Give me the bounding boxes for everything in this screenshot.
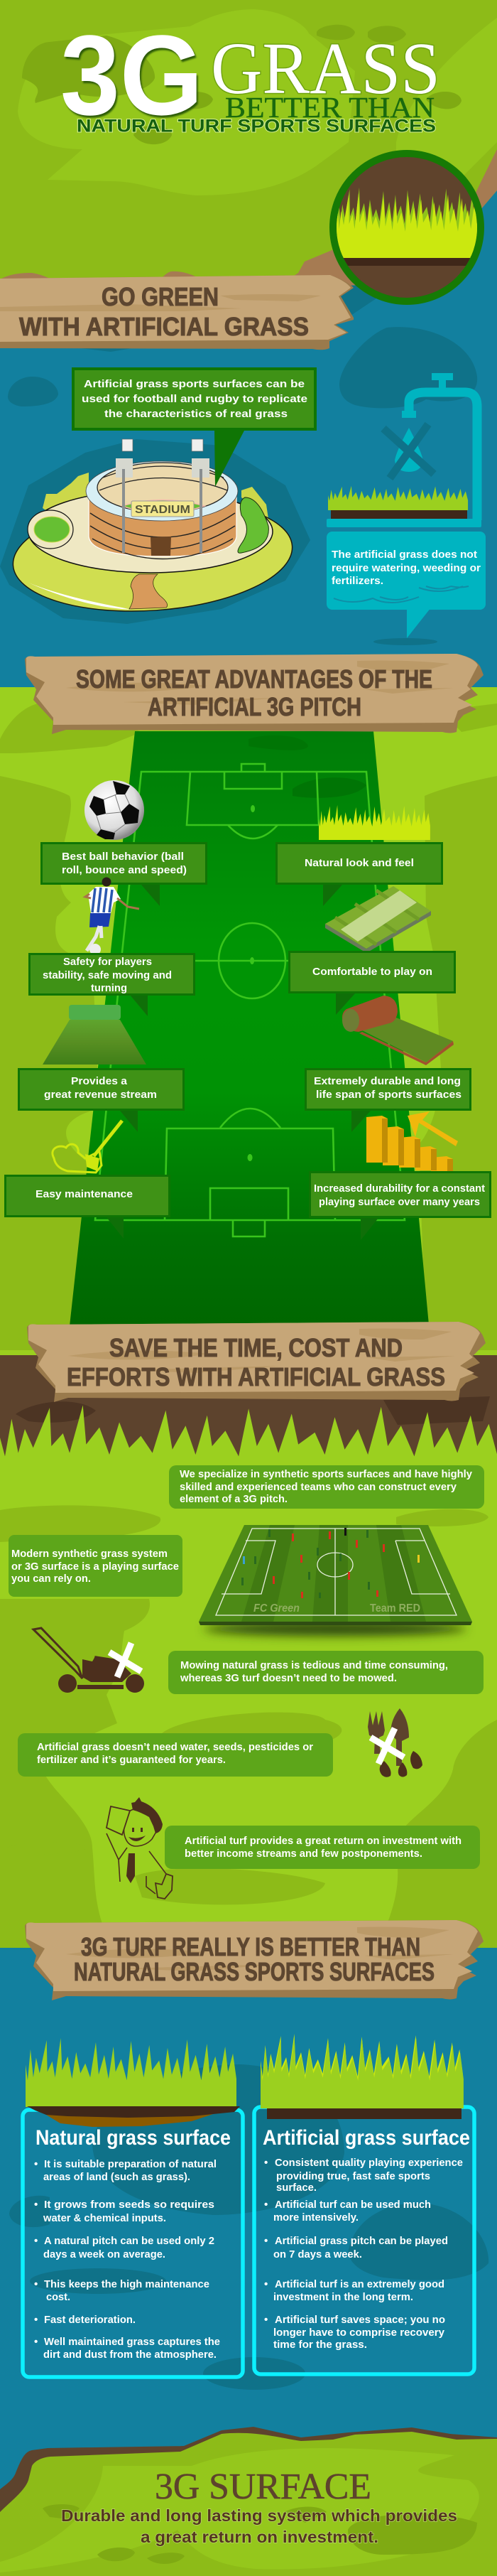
label: life span of sports surfaces: [316, 1089, 462, 1101]
man thumbs-up hand: [155, 1874, 173, 1899]
text box: no water or seeds: [18, 1733, 333, 1777]
sign plank: [26, 654, 478, 725]
field side: [199, 1622, 472, 1625]
stadium tiers: [99, 466, 227, 490]
advantage box: best ball behavior: [41, 843, 206, 906]
text box: mowing natural grass: [168, 1651, 484, 1694]
callout shadow: [373, 638, 437, 645]
panel bullet list: •: [264, 2235, 268, 2247]
label: Comfortable to play on: [312, 966, 432, 978]
icon: turf roll: [342, 996, 454, 1065]
stadium pitch: [122, 500, 204, 513]
panel bullet list: •: [264, 2199, 268, 2211]
callout text: the characteristics of real grass: [104, 408, 288, 420]
text: Modern synthetic grass system: [11, 1548, 168, 1560]
icon: lawn mower crossed out: [33, 1628, 144, 1693]
sign plank shadow: [25, 654, 484, 734]
turf carpet: [362, 1018, 453, 1062]
panel: artificial grass surface: [254, 2034, 474, 2374]
player shorts: [89, 913, 111, 927]
text: you can rely on.: [11, 1573, 91, 1585]
advantages section background: [0, 687, 497, 1359]
field lines: [216, 1529, 457, 1615]
soil band: [0, 1355, 497, 1465]
bottom shoreline: [0, 2427, 497, 2516]
panel bullet list: time for the grass.: [273, 2339, 367, 2351]
panel bullet list: •: [34, 2278, 38, 2290]
icon: natural grass patch: [319, 805, 430, 840]
advantage box: durable life span: [305, 1069, 470, 1132]
decorative water blobs: [9, 2064, 488, 2390]
artificial grass tuft: [261, 2037, 464, 2108]
advantage box: revenue stream: [18, 1069, 183, 1132]
tail: [130, 995, 148, 1016]
callout text: fertilizers.: [332, 575, 383, 587]
team label: FC Green: FC Green: [253, 1602, 300, 1615]
label: roll, bounce and speed): [62, 864, 187, 876]
pitch lines: [95, 764, 405, 1236]
panel bullet list: Artificial turf can be used much: [275, 2199, 431, 2211]
garden spade: [390, 1708, 409, 1766]
panel bullet list: It is suitable preparation of natural: [44, 2158, 217, 2170]
field surface: [199, 1525, 472, 1622]
text: [180, 1468, 473, 1505]
box: [277, 843, 442, 884]
natural grass tuft: [26, 2038, 236, 2107]
closing title: 3G SURFACE: 3G SURFACE: [155, 2467, 371, 2507]
brown shoreline: [0, 149, 497, 313]
pitch spots: [248, 805, 255, 1161]
stadium rim: [86, 461, 238, 521]
panel heading: Artificial grass surface: [263, 2126, 470, 2150]
man face: [124, 1809, 157, 1846]
heading sign: advantages: [25, 654, 484, 734]
icon: football player: [85, 877, 139, 955]
text box: return on investment: [165, 1826, 480, 1869]
panel bullet list: •: [264, 2157, 268, 2169]
icon: happy businessman with money: [106, 1797, 173, 1899]
field goalkeeper yellow: [417, 1555, 420, 1563]
bottom light patches: [0, 2448, 479, 2572]
man hair: [131, 1797, 163, 1833]
right water inlet: [426, 190, 497, 355]
text: [185, 1835, 462, 1860]
stadium small lawn: [28, 510, 73, 549]
faucet nozzle: [402, 411, 416, 418]
decorative water blobs: [0, 327, 477, 624]
stadium plaza: [28, 490, 273, 573]
panel bullet list: Fast deterioration.: [44, 2314, 136, 2326]
text: [37, 1741, 313, 1766]
artificial grass highlight: [261, 2034, 463, 2103]
sign plank shadow: [27, 1322, 486, 1402]
tail: [323, 885, 342, 906]
player legs: [87, 926, 102, 951]
callout text: [332, 549, 481, 587]
tail: [120, 1111, 138, 1132]
turf roll body: [342, 996, 398, 1032]
stadium island: [9, 491, 296, 620]
chart bars: [366, 1116, 453, 1171]
box: [290, 952, 454, 992]
panel bullet list: •: [34, 2199, 38, 2211]
panel heading: Natural grass surface: [36, 2126, 231, 2150]
stadium cylinder: [89, 491, 236, 556]
stadium pond lawn: [238, 497, 268, 553]
stadium path: [129, 574, 168, 609]
crossed out mark: [383, 424, 434, 478]
text: element of a 3G pitch.: [180, 1493, 288, 1505]
field players green: [241, 1529, 370, 1598]
label: Extremely durable and long: [314, 1075, 461, 1087]
text: We specialize in synthetic sports surfaces and have highly: [180, 1468, 473, 1480]
title: [60, 11, 440, 139]
callout box: [327, 532, 486, 610]
sign plank: [28, 1322, 480, 1393]
football pitch: [69, 731, 430, 1332]
box: [305, 1069, 470, 1110]
label: Safety for players: [63, 956, 152, 968]
panel bullet list: days a week on average.: [43, 2248, 165, 2260]
panel bullet list: [34, 2158, 220, 2361]
panel bullet list: longer have to comprise recovery: [273, 2327, 445, 2339]
label: great revenue stream: [44, 1089, 157, 1101]
player shirt stripes: [92, 888, 112, 912]
artificial soil strip: [267, 2108, 462, 2119]
sign text: artificial 3G pitch: ARTIFICIAL 3G PITCH: [148, 692, 361, 721]
pitch surface: [69, 731, 430, 1332]
closing title: [61, 2467, 457, 2546]
tail: [336, 993, 355, 1015]
label: [314, 1075, 462, 1101]
label: [314, 1182, 485, 1208]
3D football field illustration: [199, 1525, 472, 1636]
mower wheels: [58, 1674, 144, 1693]
bar shading: [382, 1119, 453, 1171]
icon: cricket pitch: [325, 886, 431, 953]
panel bullet list: Artificial turf is an extremely good: [275, 2278, 444, 2290]
garden fork: [368, 1711, 385, 1754]
text: whereas 3G turf doesn’t need to be mowed.: [180, 1672, 397, 1684]
stadium sign: [131, 501, 194, 517]
player ball: [89, 944, 101, 955]
mower handle: [33, 1628, 82, 1678]
panel bullet list: •: [34, 2235, 38, 2247]
sign wood grain: [66, 1927, 453, 1971]
tail: [361, 1218, 378, 1240]
box: [18, 1069, 183, 1110]
label: Provides a: [71, 1075, 128, 1087]
label: turning: [91, 982, 127, 994]
faucet handle: [432, 373, 453, 392]
panel bullet list: investment in the long term.: [273, 2291, 413, 2303]
player arms: [85, 894, 139, 909]
panel bullet list: on 7 days a week.: [273, 2248, 362, 2260]
title: BETTER THAN: BETTER THAN: [225, 91, 435, 124]
callout text: require watering, weeding or: [332, 562, 481, 574]
title: 3G: 3G: [60, 11, 203, 139]
box: [41, 843, 206, 884]
stadium sign text: STADIUM: [135, 504, 190, 516]
callout: artificial grass sports surfaces: [73, 369, 315, 487]
player shirt: [88, 887, 121, 913]
closing text line two: a great return on investment.: [141, 2528, 378, 2546]
grass cross-section circle: [333, 153, 483, 301]
sign text: with artificial grass: WITH ARTIFICIAL GRASS: [19, 312, 309, 341]
panel bullet list: areas of land (such as grass).: [43, 2171, 190, 2183]
hero section background: [0, 0, 497, 313]
advantage box: comfortable to play on: [290, 952, 454, 1015]
icon: broom and dust: [53, 1121, 122, 1173]
water drop: [395, 428, 423, 472]
advantage box: easy maintenance: [6, 1175, 169, 1239]
panel bullet list: Artificial turf saves space; you no: [275, 2314, 445, 2326]
team label: Team RED: Team RED: [370, 1602, 420, 1615]
sign text: go green: GO GREEN: [102, 282, 219, 311]
faucet pipe: [409, 392, 477, 520]
panel bullet list: cost.: [46, 2291, 70, 2303]
sign wood grain: [66, 661, 453, 705]
player head: [102, 877, 111, 887]
advantage box: safety for players: [30, 954, 195, 1016]
panel frame: [23, 2110, 243, 2377]
faucet base: [327, 519, 481, 527]
title: GRASS: GRASS: [211, 28, 440, 109]
text: fertilizer and it’s guaranteed for years.: [37, 1754, 226, 1766]
icon: soccer ball: [84, 780, 144, 840]
stadium illustration: [9, 439, 296, 620]
heading sign: 3G turf better: [25, 1920, 484, 2000]
man eyes and smile: [129, 1828, 146, 1841]
field shadow: [204, 1622, 466, 1636]
bottom green land: [0, 2432, 497, 2576]
sign text: save the time: SAVE THE TIME, COST AND: [109, 1333, 403, 1362]
field referee blue: [243, 1556, 245, 1564]
man tie: [126, 1853, 135, 1883]
panel bullet list: This keeps the high maintenance: [44, 2278, 209, 2290]
seeds: [380, 1751, 422, 1777]
mower body: [82, 1656, 131, 1682]
panel bullet list: A natural pitch can be used only 2: [44, 2235, 214, 2247]
label: Increased durability for a constant: [314, 1182, 485, 1195]
panel bullet list: It grows from seeds so requires: [44, 2199, 214, 2211]
icon: bar chart with arrow: [366, 1111, 458, 1171]
sign plank shadow: [25, 1920, 484, 2000]
callout tail: [214, 429, 245, 487]
callout tail: [407, 608, 431, 638]
grass strip: [328, 486, 468, 510]
icon: grass roll revenue: [43, 1005, 146, 1065]
icon: garden tools and seeds crossed out: [368, 1708, 422, 1777]
panel bullet list: Artificial grass pitch can be played: [275, 2235, 448, 2247]
turf roll end: [342, 1009, 359, 1032]
stadium island rim: [28, 583, 131, 610]
box: [30, 954, 195, 995]
field players red: [273, 1531, 385, 1598]
sign plank: [26, 1920, 478, 1991]
soil strip: [331, 510, 467, 519]
panel bullet list: •: [34, 2336, 38, 2348]
man body outline: [106, 1833, 166, 1894]
stadium door: [151, 537, 171, 556]
closing text line one: Durable and long lasting system which provides: [61, 2506, 457, 2525]
callout box: [73, 369, 315, 429]
chart arrow: [408, 1111, 458, 1146]
panel bullet list: providing true, fast safe sports: [276, 2170, 430, 2182]
icon: faucet over grass: [327, 373, 481, 527]
bottom darker bushes: [43, 2504, 477, 2564]
man banknote: [106, 1806, 130, 1835]
panel bullet list: [264, 2157, 463, 2351]
panel bullet list: surface.: [276, 2182, 317, 2194]
text: Artificial turf provides a great return on investment with: [185, 1835, 462, 1847]
panel bullet list: Consistent quality playing experience: [275, 2157, 463, 2169]
panel bullet list: Well maintained grass captures the: [44, 2336, 220, 2348]
tail: [106, 1217, 124, 1239]
panel: natural grass surface: [23, 2038, 243, 2377]
water ripples: [334, 586, 469, 603]
grass fringe: [0, 1405, 497, 1489]
field stripes: [241, 1525, 426, 1622]
text: [180, 1659, 448, 1684]
label: [44, 1075, 157, 1101]
callout text: Artificial grass sports surfaces can be: [84, 378, 305, 390]
water band: [0, 284, 497, 689]
label: playing surface over many years: [319, 1196, 480, 1208]
panel bullet list: •: [34, 2314, 38, 2326]
turf carpet edge: [359, 1032, 454, 1065]
white cross: [109, 1643, 141, 1677]
text: Mowing natural grass is tedious and time consuming,: [180, 1659, 448, 1671]
panel frame: [254, 2107, 474, 2374]
natural soil lower: [46, 2114, 213, 2127]
stadium small lawn green: [34, 517, 70, 542]
heading sign: go green: [0, 275, 354, 350]
stadium floodlights: [116, 439, 209, 553]
callout text: The artificial grass does not: [332, 549, 477, 561]
label: [62, 851, 187, 876]
panel bullet list: •: [264, 2278, 268, 2290]
stadium seats: [97, 463, 228, 512]
text box: we specialize: [169, 1465, 484, 1509]
label: Best ball behavior (ball: [62, 851, 184, 863]
box: [6, 1175, 169, 1217]
panel bullet list: more intensively.: [273, 2211, 359, 2224]
title: natural turf sports surfaces: NATURAL TURF SPORTS SURFACES: [77, 117, 436, 136]
label: Natural look and feel: [305, 857, 414, 869]
sign text: efforts: EFFORTS WITH ARTIFICIAL GRASS: [67, 1362, 445, 1391]
callout: does not require watering: [327, 532, 486, 645]
white cross: [371, 1728, 404, 1764]
panel bullet list: •: [264, 2314, 268, 2326]
advantage box: natural look and feel: [277, 843, 442, 906]
text: [11, 1548, 179, 1585]
text: better income streams and few postponements.: [185, 1848, 422, 1860]
savings section background: [0, 1355, 497, 1949]
pitch dark patches: [248, 735, 366, 798]
panel bullet list: dirt and dust from the atmosphere.: [43, 2349, 217, 2361]
box: [310, 1173, 490, 1217]
label: [43, 956, 172, 994]
label: Easy maintenance: [36, 1188, 133, 1200]
heading sign: save time: [27, 1322, 486, 1402]
panel bullet list: •: [34, 2158, 38, 2170]
text box: modern synthetic grass: [9, 1535, 182, 1597]
advantage box: increased durability: [310, 1173, 490, 1240]
stadium bands: [90, 513, 235, 559]
natural soil upper: [27, 2106, 240, 2118]
stadium bushes: [43, 473, 268, 519]
label: stability, safe moving and: [43, 969, 172, 981]
comparison section water background: [0, 1948, 497, 2502]
callout text: used for football and rugby to replicate: [82, 393, 307, 405]
text: Artificial grass doesn’t need water, seeds, pesticides or: [37, 1741, 313, 1753]
callout text: [82, 378, 307, 420]
sign wood grain: [68, 1329, 455, 1373]
panel bullet list: water & chemical inputs.: [43, 2212, 166, 2224]
dark water band: [0, 242, 398, 352]
text: skilled and experienced teams who can construct every: [180, 1481, 457, 1493]
text: or 3G surface is a playing surface: [11, 1561, 179, 1573]
tail: [351, 1111, 371, 1132]
tail: [141, 885, 160, 906]
field official dark: [344, 1528, 346, 1536]
